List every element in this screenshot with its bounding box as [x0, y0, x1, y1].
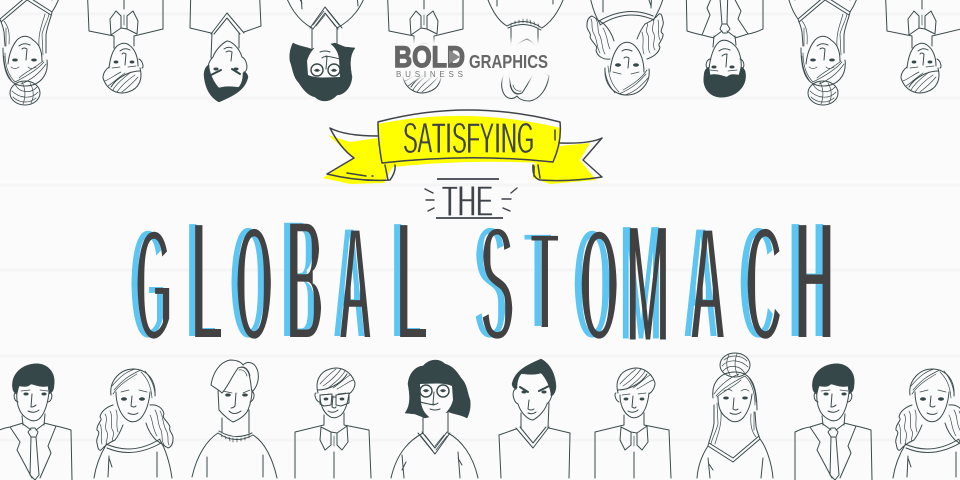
logo: Bold Business Graphics: GRAPHICS	[469, 52, 548, 72]
person: suit man, second	[795, 364, 872, 480]
person: curly hair woman	[391, 360, 478, 478]
banner ribbon	[323, 110, 602, 184]
person: V-neck man	[499, 359, 570, 478]
heading: SATISFYING: SATISFYING	[403, 115, 534, 163]
person: bow tie man, top	[387, 0, 463, 93]
person: suit man	[0, 364, 72, 480]
ribbon yellow fill	[323, 116, 596, 184]
title: GLOBAL STOMACH	[130, 179, 834, 382]
top row of upside-down people	[0, 0, 960, 105]
logo: Bold Business Graphics	[390, 40, 555, 80]
person: striped hair man, top	[87, 0, 163, 93]
person: sweater man, top	[483, 0, 568, 101]
person: wavy hair woman, second	[893, 369, 960, 478]
person: glasses man	[295, 368, 371, 478]
person: dark hair man, top	[190, 0, 261, 102]
title main layer in charcoal: GLOBAL	[136, 180, 428, 382]
person: bun woman, top	[0, 0, 63, 105]
heading: THE with rays and rules: THE	[442, 176, 493, 226]
person: striped hair man	[595, 368, 671, 478]
title shadow layer in blue: GLOBAL	[130, 179, 422, 381]
person: suit man, top	[686, 0, 763, 97]
title shadow layer in blue: STOMACH	[473, 181, 827, 381]
logo: Bold Business Graphics: BOLD	[394, 41, 465, 74]
title main layer in charcoal: STOMACH	[480, 182, 834, 382]
person: bun woman	[697, 353, 773, 478]
person: striped hair man, top right	[885, 0, 960, 93]
bottom row of people	[0, 353, 960, 480]
person: bun woman, top right	[785, 0, 861, 105]
ribbon outline	[327, 110, 602, 181]
logo: Bold Business Graphics: BUSINESS	[396, 70, 463, 79]
title shadow layer in blue	[130, 179, 827, 381]
person: curly hair woman, top	[282, 0, 369, 101]
heading: THE with rays and rules	[425, 176, 517, 226]
person: sweater man	[192, 360, 277, 478]
person: wavy hair woman, top	[587, 0, 666, 95]
title main layer in charcoal	[136, 180, 834, 382]
person: wavy hair woman	[94, 369, 173, 478]
